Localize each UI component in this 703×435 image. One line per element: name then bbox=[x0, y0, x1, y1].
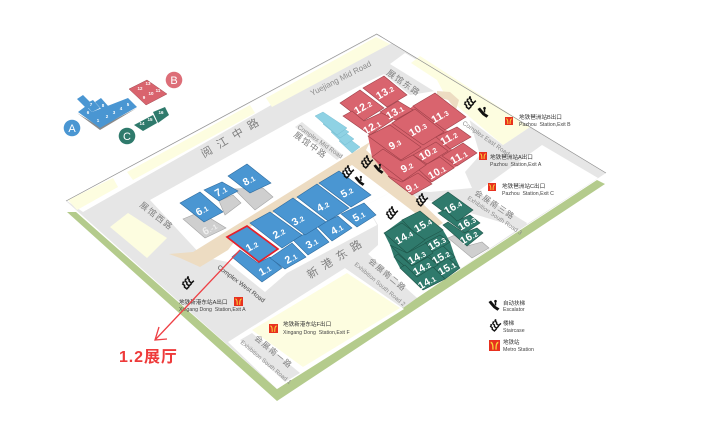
hall 4.2 bbox=[297, 184, 349, 221]
station: Xingang Dong exit A bbox=[179, 297, 246, 313]
hall 14.2: 14.2 bbox=[411, 259, 433, 278]
map base: green ground edge bbox=[67, 180, 605, 401]
hall 4.1 bbox=[317, 216, 352, 241]
key: zone A mini map: 3 bbox=[113, 110, 116, 115]
label: Exhibition South Road 3 Chinese: 会展南三路 bbox=[473, 187, 517, 222]
hall 1.1 bbox=[232, 250, 282, 282]
label: Yuejiang Mid Road English: Yuejiang Mid Road bbox=[309, 59, 373, 98]
hall 8.1: 8.1 bbox=[241, 172, 258, 189]
legend: escalator: Escalator bbox=[503, 307, 525, 313]
hall 2.2: 2.2 bbox=[271, 225, 288, 242]
label: Exhibition South Road 1 English: Exhibition South Road 1 bbox=[239, 340, 292, 386]
teal hall plot bbox=[366, 190, 520, 298]
station: Pazhou exit B bbox=[505, 113, 571, 128]
station: Xingang Dong exit A: 地铁新港东站A出口 bbox=[179, 298, 227, 306]
teal hall underlay bbox=[384, 211, 460, 290]
station: Pazhou exit B: 地铁琶洲站B出口 bbox=[519, 113, 562, 121]
hall 12.2: 12.2 bbox=[352, 98, 374, 117]
key: zone B mini map: 9 bbox=[143, 95, 146, 100]
tan pedestrian concourse bbox=[169, 91, 459, 267]
key: zone C mini map: 15 bbox=[147, 117, 153, 122]
hall 3.2: 3.2 bbox=[290, 212, 307, 229]
key: zone C mini map bbox=[134, 107, 169, 131]
key: zone A mini map: 1 bbox=[97, 118, 100, 123]
legend: escalator: 自动扶梯 bbox=[503, 299, 526, 307]
hall 12.1: 12.1 bbox=[361, 118, 383, 137]
hall 10.3: 10.3 bbox=[407, 120, 429, 139]
hall 9.3: 9.3 bbox=[387, 136, 404, 153]
station: Pazhou exit C bbox=[488, 182, 554, 197]
label: Xingang East Road: 新港东路 bbox=[304, 234, 369, 282]
hall 3.1 bbox=[293, 228, 329, 255]
legend: metro station: 地铁站 bbox=[503, 338, 520, 346]
hall 15.4: 15.4 bbox=[412, 216, 434, 235]
hall 13.2: 13.2 bbox=[374, 83, 396, 102]
hall 10.1: 10.1 bbox=[426, 163, 448, 182]
zone C teal halls bbox=[384, 192, 483, 292]
right white plot bbox=[477, 145, 598, 224]
hall 11.3: 11.3 bbox=[429, 107, 451, 126]
label: Complex East Road Chinese: 展馆东路 bbox=[385, 67, 422, 98]
label: Exhibition South Road 2 Chinese: 会展南二路 bbox=[367, 256, 409, 293]
hall 16.2: 16.2 bbox=[458, 228, 480, 247]
station: Xingang Dong exit F: Xingang Dong Station,Exit F bbox=[283, 330, 350, 336]
hall 13.1: 13.1 bbox=[384, 103, 406, 122]
pink hall underlay bbox=[368, 106, 477, 195]
key: zone A mini map: 7 bbox=[90, 102, 93, 107]
legend: staircase: 楼梯 bbox=[503, 319, 515, 327]
key: zone B mini map bbox=[129, 80, 167, 105]
label: Complex East Road English: Complex East Road bbox=[461, 120, 511, 158]
badge A: A bbox=[68, 123, 76, 135]
pale blue steps bbox=[315, 112, 360, 153]
label: Exhibition South Road 2 English: Exhibition South Road 2 bbox=[353, 262, 406, 308]
key: zone C mini map: 14 bbox=[139, 121, 145, 126]
label: Yuejiang Mid Road Chinese: 阅江中路 bbox=[199, 112, 267, 161]
station: Xingang Dong exit F: 地铁新港东站F出口 bbox=[283, 320, 331, 328]
hall 16.3: 16.3 bbox=[456, 214, 478, 233]
station: Pazhou exit A: Pazhou Station,Exit A bbox=[490, 162, 542, 168]
key: zone C mini map: 16 bbox=[158, 110, 164, 115]
label: Complex Mid Road Chinese: 展馆中路 bbox=[292, 130, 329, 160]
badge B: B bbox=[170, 75, 178, 87]
key: zone A mini map: 5 bbox=[127, 102, 130, 107]
red arrow to hall 1.2 bbox=[155, 250, 240, 340]
hall 1.1: 1.1 bbox=[257, 262, 274, 279]
badge A bbox=[64, 120, 80, 136]
hall 2.1: 2.1 bbox=[283, 250, 300, 267]
road labels bbox=[138, 59, 523, 386]
hall 4.2: 4.2 bbox=[315, 198, 332, 215]
legend: metro station bbox=[489, 338, 534, 353]
highlighted hall 1.2: 1.2 bbox=[244, 238, 261, 255]
legend: metro station: Metro Station bbox=[503, 347, 534, 353]
callout: hall 1.2: 1.2展厅 bbox=[119, 349, 178, 366]
hall 5.1 bbox=[341, 203, 376, 227]
hall 7.1: 7.1 bbox=[213, 183, 230, 200]
key: zone B mini map: 10 bbox=[148, 91, 154, 96]
hall 3.1: 3.1 bbox=[304, 235, 321, 252]
station: Pazhou exit A bbox=[479, 152, 542, 168]
station: Pazhou exit C: 地铁琶洲站C出口 bbox=[502, 182, 545, 190]
hall 5.2: 5.2 bbox=[339, 184, 356, 201]
hall 2.2 bbox=[250, 212, 302, 248]
hall 11.2: 11.2 bbox=[438, 129, 460, 148]
badge B bbox=[166, 72, 182, 88]
hall 9.2: 9.2 bbox=[399, 159, 416, 176]
station: Pazhou exit A: 地铁琶洲站A出口 bbox=[490, 153, 533, 161]
key: zone A mini map: 4 bbox=[120, 106, 123, 111]
hall 6.1 bbox=[180, 192, 223, 222]
hall 3.2 bbox=[273, 198, 326, 235]
key: zone B mini map: 11 bbox=[156, 88, 161, 93]
icons: stairs on map bbox=[182, 96, 476, 289]
hall 7.1 bbox=[204, 182, 238, 201]
grey halls: 6.-1 bbox=[200, 220, 220, 238]
key: zone A mini map: 6 bbox=[87, 110, 90, 115]
badge C bbox=[119, 128, 135, 144]
label: Complex Mid Road English: Complex Mid Road bbox=[296, 124, 344, 161]
hall 14.1: 14.1 bbox=[416, 273, 438, 292]
legend: staircase: Staircase bbox=[503, 328, 525, 334]
hall 4.1: 4.1 bbox=[329, 221, 346, 238]
hall 6.1: 6.1 bbox=[194, 202, 211, 219]
key: zone A mini map: 2 bbox=[106, 114, 109, 119]
zone B pink halls bbox=[340, 76, 477, 196]
key: zone A mini map: 8 bbox=[102, 103, 105, 108]
bottom plot with yellow block bbox=[228, 268, 404, 389]
left yellow plot bbox=[110, 213, 167, 258]
hall 15.1: 15.1 bbox=[436, 259, 458, 278]
legend: escalator bbox=[488, 299, 526, 313]
legend bbox=[488, 299, 534, 353]
icons: escalators on map bbox=[354, 107, 488, 186]
hall 11.1: 11.1 bbox=[448, 148, 470, 167]
key: zone B mini map: 12 bbox=[137, 86, 143, 91]
top-left verge with yellow strips bbox=[67, 35, 392, 212]
grey halls bbox=[183, 188, 489, 258]
station: Pazhou exit C: Pazhou Station,Exit C bbox=[502, 191, 554, 197]
hall 5.2 bbox=[319, 171, 371, 207]
station: Xingang Dong exit A: Xingang Dong Station,Exit A bbox=[179, 307, 246, 313]
highlighted hall 1.2 bbox=[227, 226, 278, 262]
hall 2.1 bbox=[270, 243, 306, 269]
hall 8.1 bbox=[228, 164, 271, 193]
map base: road surface bbox=[66, 34, 606, 389]
hall 16.4: 16.4 bbox=[442, 198, 464, 217]
label: Complex West Road Chinese: 展馆西路 bbox=[138, 200, 175, 232]
label: Exhibition South Road 3 English: Exhibition South Road 3 bbox=[466, 196, 523, 237]
zone A blue halls bbox=[180, 164, 376, 282]
station: Xingang Dong exit F bbox=[269, 320, 350, 336]
road bands bbox=[240, 122, 527, 382]
station: Pazhou exit B: Pazhou Station,Exit B bbox=[519, 122, 571, 128]
hall 14.3: 14.3 bbox=[406, 248, 428, 267]
top-right verge with yellow strip bbox=[390, 53, 530, 145]
hall 15.2: 15.2 bbox=[430, 248, 452, 267]
central white plot bbox=[150, 74, 480, 292]
hall 9.1: 9.1 bbox=[404, 179, 421, 196]
label: Exhibition South Road 1 Chinese: 会展南一路 bbox=[253, 333, 295, 370]
key: zone B mini map: 13 bbox=[145, 81, 151, 86]
hall 14.4: 14.4 bbox=[393, 228, 415, 247]
hall 10.2: 10.2 bbox=[417, 144, 439, 163]
legend: staircase bbox=[490, 319, 525, 334]
key: zone A mini map bbox=[77, 95, 137, 130]
hall 5.1: 5.1 bbox=[351, 208, 368, 225]
label: Complex West Road English: Complex West Road bbox=[216, 264, 266, 305]
map outline: top edges bbox=[66, 34, 606, 201]
hall 15.3: 15.3 bbox=[426, 234, 448, 253]
badge C: C bbox=[123, 131, 131, 143]
